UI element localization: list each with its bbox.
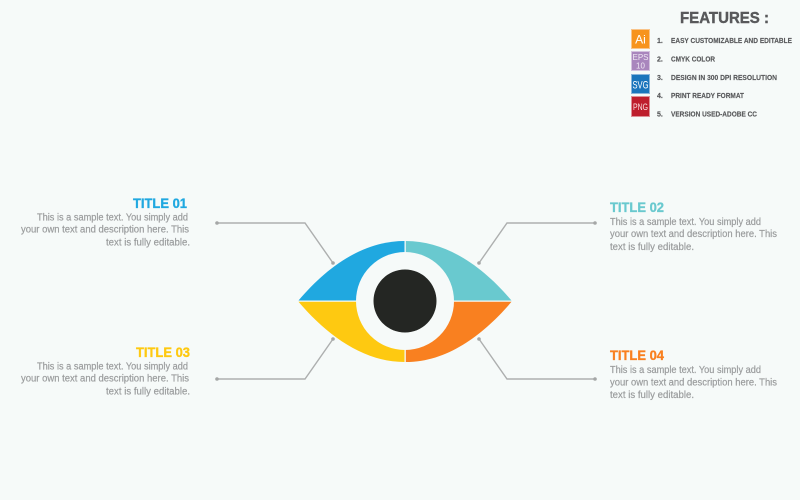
feature list: 1. (657, 38, 663, 45)
text block: title 01: TITLE 01 (133, 195, 187, 211)
text block: title 02 (610, 199, 777, 253)
feature list: EASY CUSTOMIZABLE AND EDITABLE (671, 38, 792, 45)
eye segment: bottom right orange (406, 302, 512, 362)
text block: title 03: your own text and description here. This (21, 374, 189, 384)
eye segment: top right teal (406, 241, 512, 300)
pupil (374, 270, 436, 332)
text block: title 03: text is fully editable. (106, 386, 190, 398)
connector: title 02 (477, 221, 597, 265)
text block: title 04: This is a sample text. You simply add (610, 365, 761, 376)
iris ring (356, 252, 454, 350)
feature list: CMYK COLOR (671, 56, 715, 64)
eye diagram (298, 241, 512, 362)
text block: title 01: text is fully editable. (106, 238, 190, 248)
feature list: 5. (657, 112, 663, 118)
feature list: PRINT READY FORMAT (671, 93, 745, 100)
icon: SVG (632, 74, 650, 94)
feature list (657, 38, 792, 118)
icon: EPS 10: EPS (632, 53, 649, 62)
text block: title 04: TITLE 04 (610, 347, 664, 363)
text block: title 02: text is fully editable. (610, 242, 694, 253)
text block: title 04 (610, 347, 777, 401)
text block: title 04: your own text and description here. This (610, 378, 777, 388)
text block: title 02: TITLE 02 (610, 199, 664, 215)
feature list: DESIGN IN 300 DPI RESOLUTION (671, 75, 777, 82)
text block: title 03: TITLE 03 (136, 344, 190, 360)
icon: EPS 10 (632, 52, 650, 70)
connector: title 01 (215, 221, 335, 265)
text block: title 01: This is a sample text. You simply add (37, 212, 188, 224)
icon: Ai (632, 30, 650, 48)
features panel (632, 10, 792, 118)
connector: title 03 (215, 337, 335, 381)
icon: PNG: PNG (633, 102, 648, 112)
connector: title 04 (477, 337, 597, 381)
text block: title 03 (21, 344, 190, 398)
text block: title 02: your own text and description here. This (610, 229, 777, 240)
feature list: VERSION USED-ADOBE CC (671, 112, 757, 118)
feature list: 2. (657, 56, 663, 64)
text block: title 03: This is a sample text. You simply add (37, 362, 188, 372)
icon: PNG (632, 96, 650, 116)
eye segment: top left blue (298, 241, 404, 300)
icon: EPS 10: 10 (636, 62, 645, 70)
eye segment: bottom left yellow (298, 302, 404, 362)
features heading: FEATURES : (680, 10, 769, 27)
text block: title 01: your own text and description here. This (21, 224, 189, 236)
text block: title 04: text is fully editable. (610, 390, 694, 401)
feature list: 3. (657, 75, 663, 82)
text block: title 02: This is a sample text. You simply add (610, 217, 761, 228)
icon: Ai: Ai (635, 32, 646, 46)
text block: title 01 (21, 195, 190, 248)
feature list: 4. (657, 93, 663, 100)
icon: SVG: SVG (632, 80, 648, 92)
